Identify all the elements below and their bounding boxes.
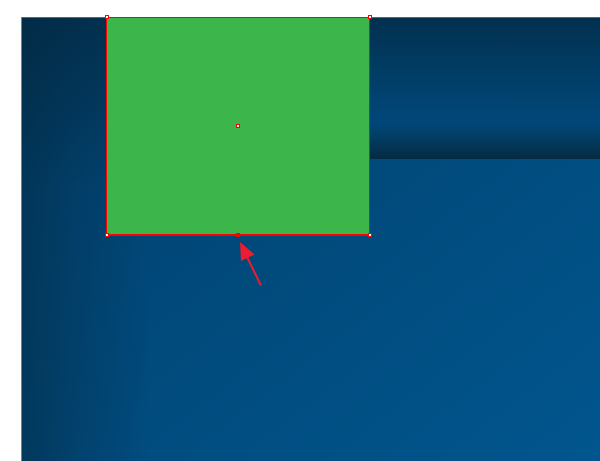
handle: center point [236,124,240,128]
handle: active bottom midpoint [236,233,240,237]
handle: bottom right [368,234,372,236]
panel: dark upper-right band [369,18,600,159]
selection handles [106,16,372,236]
handle: top left [106,16,108,18]
handle: bottom left [106,234,108,236]
handle: top right [368,16,372,18]
green selected rectangle [106,17,370,236]
arrow pointing at bottom midpoint [240,242,261,286]
